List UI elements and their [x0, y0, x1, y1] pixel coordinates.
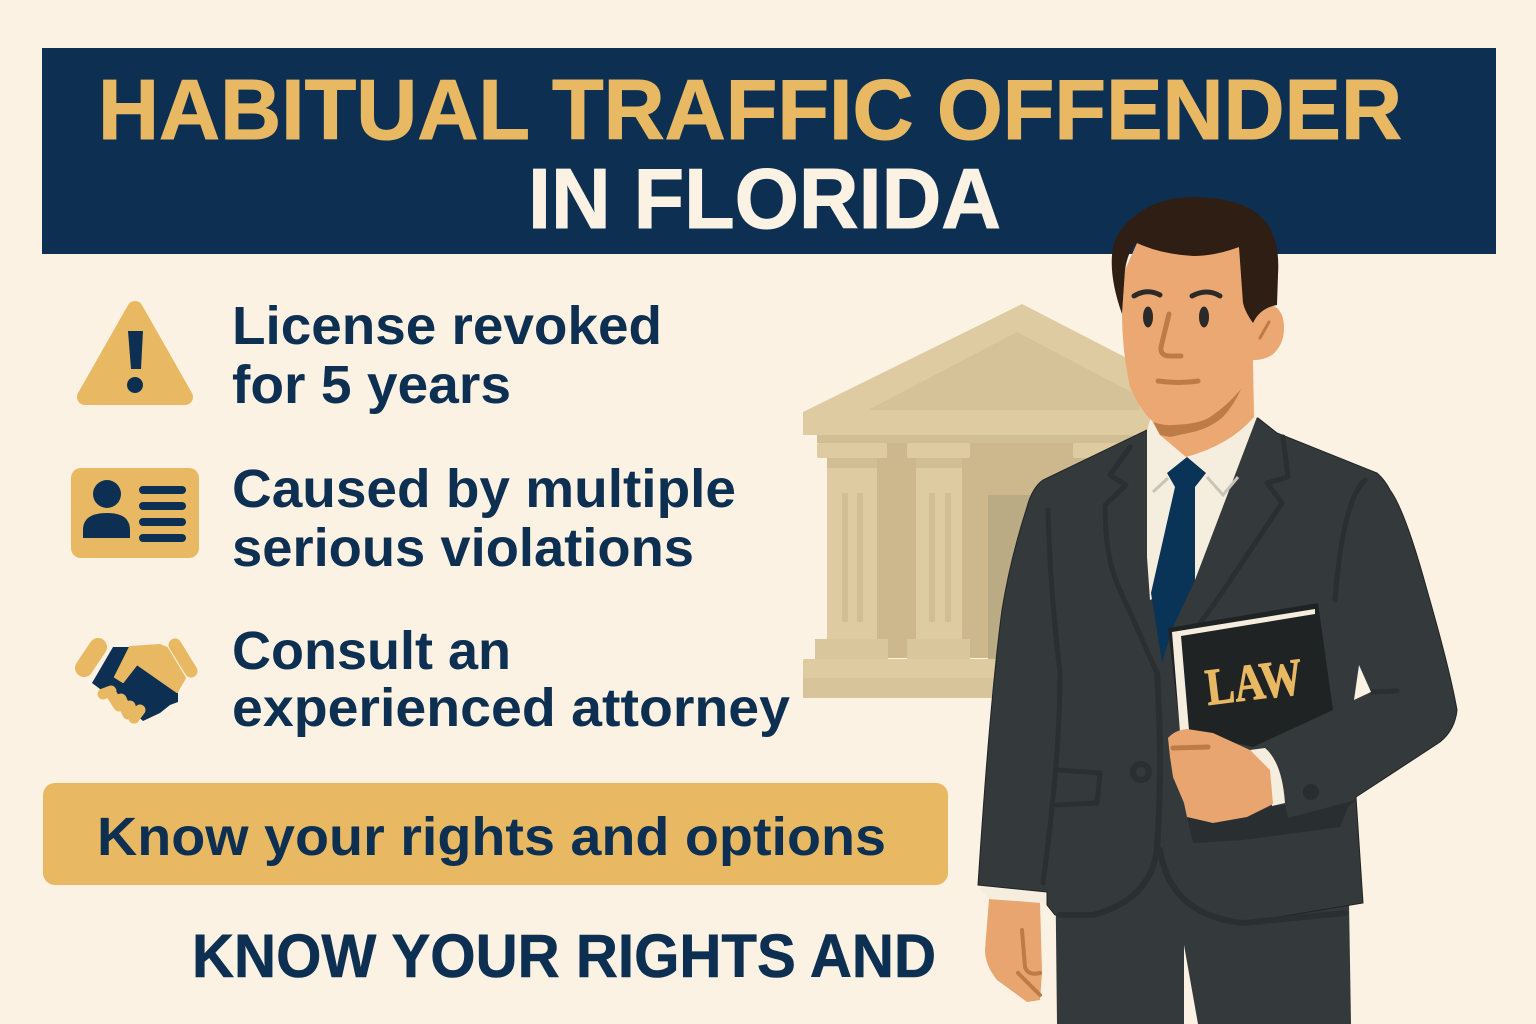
callout: know your rights — [43, 783, 948, 885]
sleeve button — [1303, 784, 1319, 800]
left hand — [978, 887, 1047, 1002]
text: caused by violations: serious violations — [232, 518, 694, 578]
callout: know your rights: Know your rights and options — [97, 807, 886, 867]
ear — [1250, 305, 1284, 360]
text: license revoked: License revoked — [232, 296, 662, 356]
illustration: attorney — [978, 197, 1457, 1024]
title banner — [42, 48, 1496, 254]
illustration: courthouse — [803, 304, 1150, 698]
eyebrows — [1134, 292, 1220, 296]
icon: id card — [71, 468, 199, 558]
icon: handshake — [84, 645, 191, 721]
icon: warning triangle — [85, 309, 185, 397]
tie — [1151, 457, 1206, 663]
text: license revoked — [232, 296, 662, 415]
text: license revoked: for 5 years — [232, 355, 511, 415]
collar lines — [1153, 477, 1238, 495]
jacket seams — [1043, 437, 1397, 923]
gap between arm and body — [1354, 665, 1371, 700]
text: consult attorney: Consult an — [232, 621, 511, 681]
law book: LAW — [1203, 649, 1306, 717]
holding hand — [1168, 729, 1273, 823]
arm shadow — [1187, 800, 1356, 843]
text: caused by violations: Caused by multiple — [232, 459, 736, 519]
shirt cuff — [1250, 748, 1285, 806]
eyes — [1143, 306, 1209, 328]
text: caused by violations — [232, 459, 736, 578]
footer text: KNOW YOUR RIGHTS AND — [192, 922, 936, 990]
shirt — [1147, 400, 1257, 600]
text: consult attorney: experienced attorney — [232, 678, 790, 738]
hair — [1112, 197, 1278, 323]
trousers — [1055, 840, 1351, 1024]
nose and mouth — [1158, 314, 1198, 382]
face and neck — [1122, 243, 1254, 457]
title line 1: HABITUAL TRAFFIC OFFENDER — [98, 63, 1402, 158]
law book — [1168, 603, 1333, 747]
text: consult attorney — [232, 621, 790, 738]
jacket — [978, 418, 1457, 923]
title line 2: IN FLORIDA — [528, 152, 1001, 247]
jaw shadow — [1153, 389, 1241, 437]
